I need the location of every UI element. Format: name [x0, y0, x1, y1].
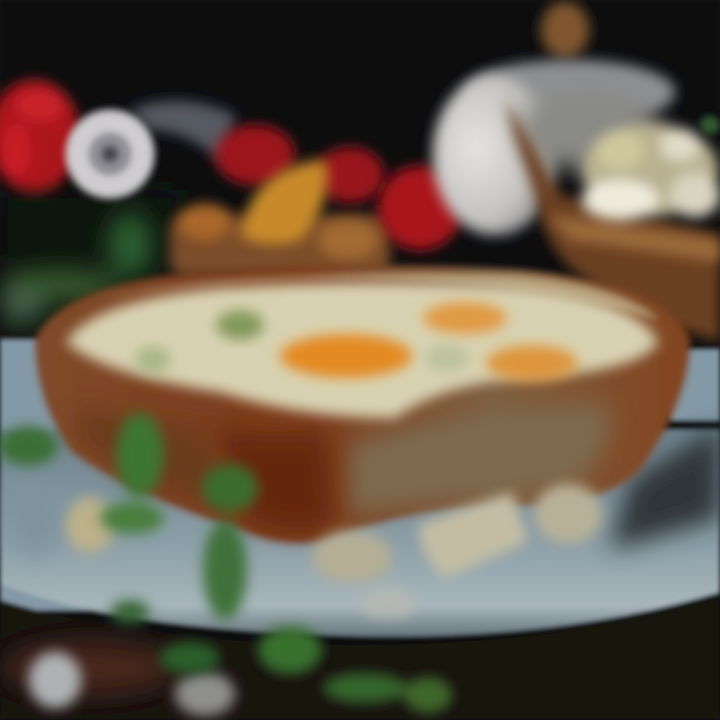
background: grey band behind flower: [130, 101, 235, 165]
tart cream filling: [66, 283, 658, 418]
white teapot: [433, 2, 675, 235]
wooden table: [0, 598, 720, 720]
red tomato left: [0, 80, 80, 192]
bread tart crust: [35, 265, 690, 543]
egg yolk top right: [423, 302, 507, 334]
background: dark left mid zone: [0, 190, 180, 340]
green herb centre on filling: [425, 344, 469, 372]
wooden bowl with white contents: [505, 100, 720, 342]
plate: [0, 340, 720, 636]
left green leaves background: [0, 213, 152, 323]
white flower garnish: [66, 110, 154, 198]
green herb sprigs: [0, 413, 452, 713]
egg yolk large: [280, 334, 412, 378]
egg yolk right: [486, 345, 578, 381]
green herb on filling: [216, 310, 264, 340]
green herb left on filling: [135, 346, 171, 374]
centre tomatoes and orange food: [170, 125, 462, 277]
crumbled cheese pieces: [66, 484, 602, 618]
